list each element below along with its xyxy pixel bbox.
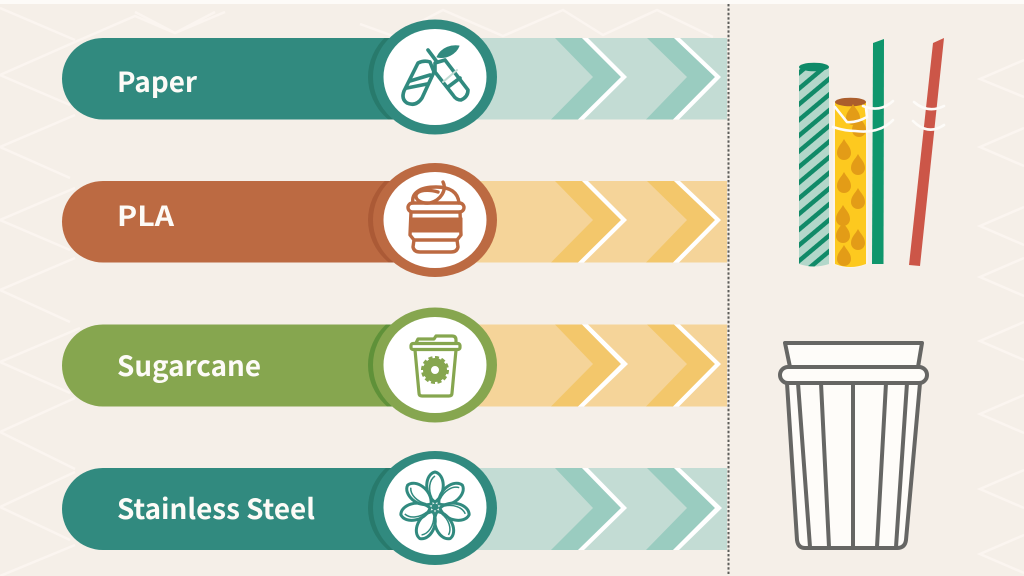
pill: Paper [62, 38, 420, 120]
pill: Stainless Steel: Stainless Steel [117, 488, 315, 528]
chevron band [470, 468, 727, 550]
icon: flower [399, 472, 471, 542]
icon circle: PLA [368, 163, 497, 277]
green straw [872, 39, 884, 264]
illustration: cup [780, 343, 927, 548]
illustration: straws [799, 38, 944, 268]
pill: Sugarcane: Sugarcane [117, 345, 261, 385]
icon: sugarcane cup [411, 336, 460, 396]
row: Sugarcane [62, 308, 727, 422]
icon circle: Sugarcane [368, 308, 497, 422]
cup ribs [798, 383, 907, 547]
icon: paper straws with leaf [403, 46, 468, 104]
row: Stainless Steel [62, 451, 727, 565]
cup rim [780, 367, 927, 383]
chevron band [470, 38, 727, 120]
chevron band [470, 181, 727, 262]
cup lid [785, 343, 922, 367]
cup body [787, 383, 920, 548]
pill: Sugarcane [62, 324, 420, 406]
yellow drop-pattern straw [833, 98, 868, 268]
icon circle: Stainless Steel [368, 451, 497, 565]
white bands [833, 101, 944, 132]
chevron band [470, 324, 727, 406]
pill: PLA [62, 181, 420, 262]
row: Paper [62, 20, 727, 134]
divider line [728, 4, 730, 576]
row: PLA [62, 163, 727, 277]
icon circle: Paper [368, 20, 497, 134]
icon: PLA cup with dome lid [408, 182, 464, 252]
pill: Stainless Steel [62, 468, 420, 550]
pill: PLA: PLA [117, 195, 175, 235]
striped straw [799, 63, 829, 267]
red straw [909, 38, 944, 266]
pill: Paper: Paper [117, 61, 198, 101]
